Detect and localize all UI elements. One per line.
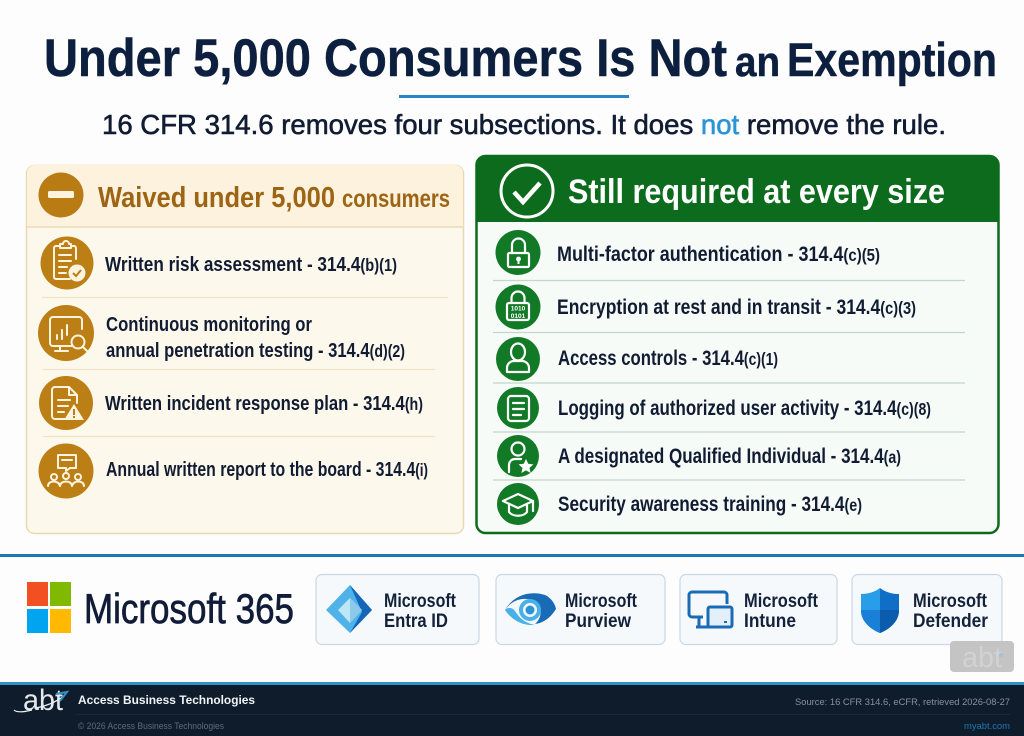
row text: encryption: Encryption at rest and in transit - 314.4(c)(3) (557, 296, 916, 319)
card: Microsoft Intune (680, 574, 837, 644)
card: Microsoft Purview: Purview (565, 611, 631, 632)
icon: graduation cap (497, 483, 539, 525)
icon: encryption lock: 0101 (511, 313, 526, 320)
row text: access controls: Access controls - 314.4(c)(1) (558, 347, 778, 370)
card: Microsoft Purview: Microsoft (565, 591, 638, 612)
subtitle: 16 CFR 314.6 removes four subsections. It does not remove the rule. (102, 109, 946, 140)
icon: encryption lock: 1010 (511, 306, 526, 312)
logo: Microsoft 365: Microsoft 365 (84, 585, 294, 632)
watermark: abt: abt (962, 642, 1002, 674)
icon: log document (497, 387, 539, 429)
watermark: abt (950, 641, 1014, 674)
title: Exemption (787, 33, 997, 86)
row text: mfa: Multi-factor authentication - 314.4(c)(5) (557, 243, 880, 266)
row text: continuous monitoring (106, 313, 405, 362)
card: Microsoft Defender: Defender (913, 611, 989, 632)
card: Microsoft Defender: Microsoft (913, 591, 988, 612)
panel: still required at every size (476, 156, 999, 533)
row text: qualified individual: A designated Qualified Individual - 314.4(a) (558, 445, 901, 468)
icon: board report (38, 444, 94, 498)
panel heading: Still required at every size (568, 173, 945, 211)
icon: qualified individual (497, 435, 539, 477)
title: an (735, 38, 780, 85)
card: Microsoft Intune: Intune (744, 611, 796, 632)
footer: company: Access Business Technologies (78, 695, 255, 707)
title: Under 5,000 Consumers Is Not (44, 29, 727, 88)
icon: Defender shield (861, 588, 899, 633)
panel heading: Waived under 5,000 (98, 182, 335, 214)
logo: abt: abt (23, 684, 64, 717)
icon: padlock (496, 230, 540, 275)
icon: clipboard check (40, 236, 94, 290)
card: Microsoft Purview (496, 574, 665, 644)
footer (0, 682, 1024, 736)
card: Microsoft Intune: Microsoft (744, 591, 819, 612)
footer: copyright: © 2026 Access Business Technologies (78, 721, 224, 731)
panel: waived under 5,000 consumers (26, 165, 464, 534)
icon: user (496, 337, 540, 381)
icon: Entra diamond (326, 585, 372, 633)
row text: continuous monitoring: Continuous monitoring or (106, 313, 312, 336)
card: Microsoft Entra ID: Microsoft (384, 591, 457, 612)
row text: awareness training: Security awareness training - 314.4(e) (558, 493, 862, 516)
card: Microsoft Entra ID (316, 574, 479, 644)
icon: Intune devices (689, 592, 732, 627)
card: Microsoft Defender (852, 574, 1002, 644)
icon: encryption lock (496, 284, 540, 330)
row text: written risk assessment: Written risk assessment - 314.4(b)(1) (105, 253, 397, 276)
icon: document with warning (39, 376, 93, 430)
row text: continuous monitoring: annual penetration testing - 314.4(d)(2) (106, 339, 405, 362)
logo: Microsoft 365 (27, 582, 294, 633)
icon: Purview eye (505, 593, 556, 625)
row text: incident response: Written incident response plan - 314.4(h) (105, 392, 423, 415)
icon: check circle (501, 165, 553, 217)
footer: source: Source: 16 CFR 314.6, eCFR, retrieved 2026-08-27 (795, 697, 1010, 708)
row text: annual report: Annual written report to the board - 314.4(i) (106, 458, 428, 481)
icon: monitor with magnifier (38, 305, 94, 361)
card: Microsoft Entra ID: Entra ID (384, 611, 448, 632)
row text: logging: Logging of authorized user activity - 314.4(c)(8) (558, 397, 931, 420)
icon: minus (38, 172, 84, 218)
panel heading: consumers (342, 185, 450, 213)
footer: url: myabt.com (964, 721, 1010, 732)
